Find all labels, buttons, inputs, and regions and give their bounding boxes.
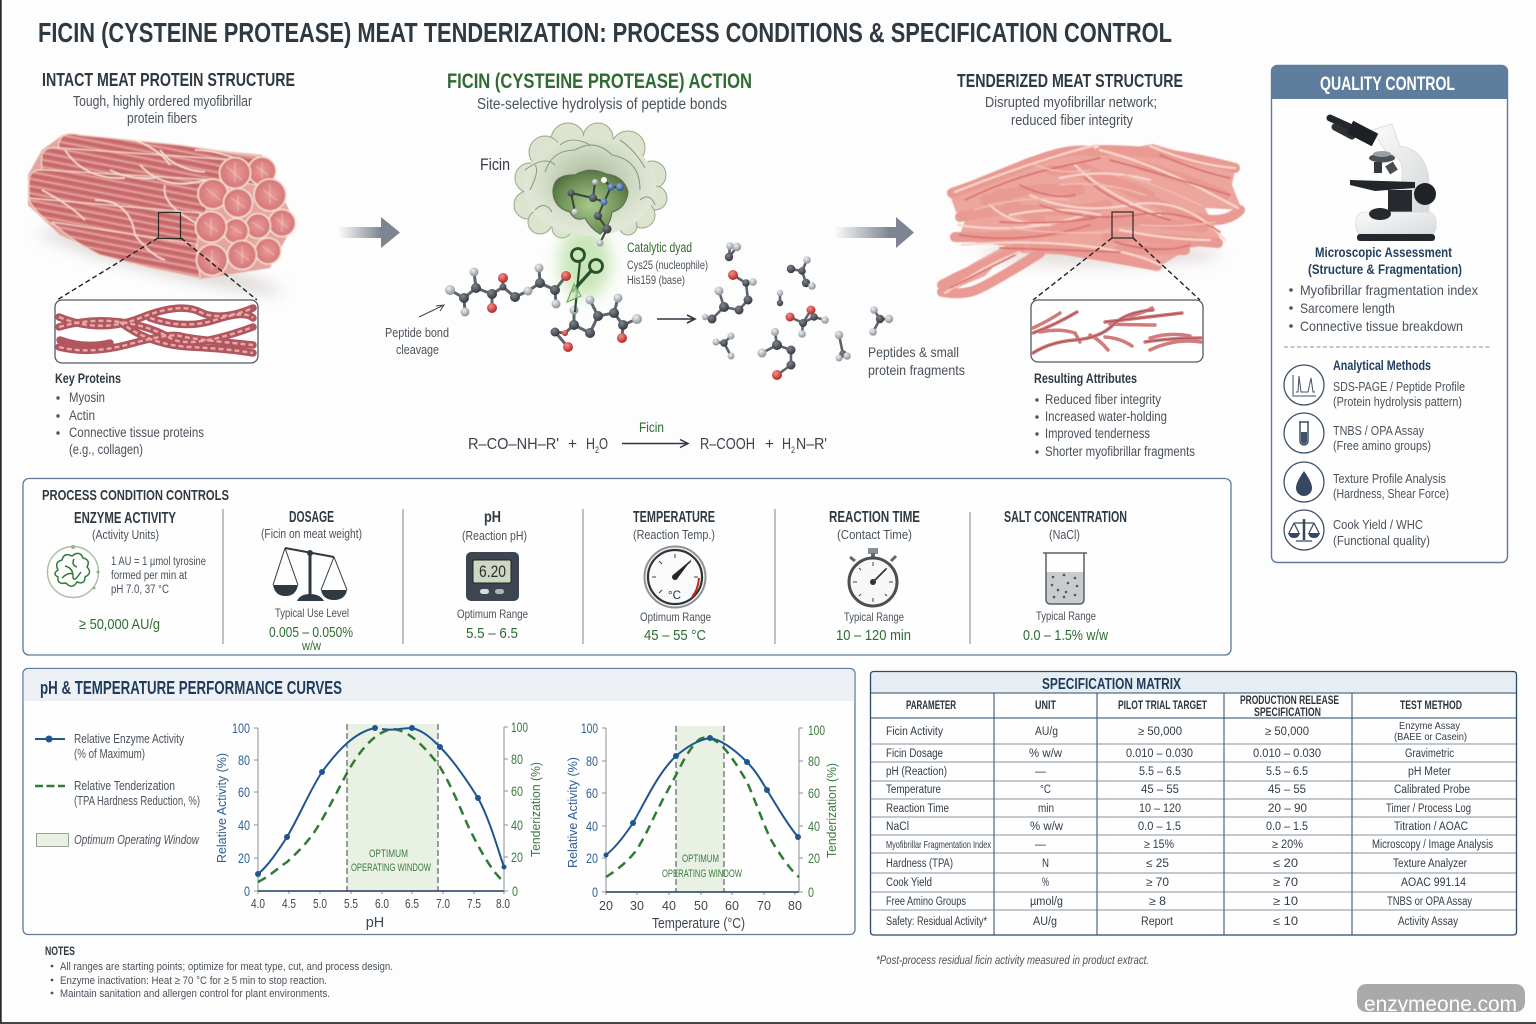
watermark xyxy=(1357,984,1525,1012)
subtitle: tenderized: reduced fiber integrity xyxy=(1011,112,1133,129)
legend: Relative Tenderization xyxy=(74,779,175,793)
equation: peptide hydrolysis: N–R' xyxy=(796,436,827,453)
column: salt concentration: SALT CONCENTRATION xyxy=(1004,509,1127,526)
chart: ph curves: 5.0 xyxy=(313,897,327,911)
panel: ficin action xyxy=(385,70,965,455)
equation: peptide hydrolysis: H xyxy=(782,436,791,453)
equation: peptide hydrolysis: 2 xyxy=(595,445,599,455)
column: salt concentration: (NaCl) xyxy=(1049,527,1080,542)
label: peptide bond cleavage: Peptide bond xyxy=(385,325,449,340)
chart: ph curves: 40 xyxy=(511,817,523,833)
chart: temperature curves: 80 xyxy=(808,753,820,769)
panel: process condition controls xyxy=(23,478,1231,655)
method: tnbs opa: (Free amino groups) xyxy=(1333,439,1431,453)
table rows: (BAEE or Casein) xyxy=(1394,731,1467,743)
column: ph: pH xyxy=(484,509,501,526)
method: tnbs opa xyxy=(1284,413,1431,453)
inset: fragmented fibers xyxy=(1031,300,1203,362)
arrow: intact to action xyxy=(338,217,400,248)
equation: peptide hydrolysis: + xyxy=(568,436,577,453)
heading: tenderized: TENDERIZED MEAT STRUCTURE xyxy=(957,71,1183,91)
chart: ph curves xyxy=(214,719,543,931)
table rows: AOAC 991.14 xyxy=(1401,877,1467,889)
chart: ph curves: pH xyxy=(366,915,384,931)
heading: specification matrix: SPECIFICATION MATRIX xyxy=(1042,676,1181,693)
subtitle: intact meat xyxy=(73,93,252,127)
chart: temperature curves: 70 xyxy=(757,899,771,913)
table rows: ≤ 25 xyxy=(1146,858,1169,870)
chart: ph curves: 80 xyxy=(238,752,250,768)
method: sds-page: SDS-PAGE / Peptide Profile xyxy=(1333,380,1465,394)
label: catalytic dyad: Catalytic dyad xyxy=(627,240,692,255)
chart: ph curves: 60 xyxy=(511,783,523,799)
table rows: Ficin Activity xyxy=(886,726,943,738)
chart: ph curves: 100 xyxy=(511,719,528,735)
list: key proteins: (e.g., collagen) xyxy=(69,442,143,457)
heading: process controls: PROCESS CONDITION CONTROLS xyxy=(42,487,229,504)
column: ph: (Reaction pH) xyxy=(462,528,527,543)
notes: All ranges are starting points; optimize for meat type, cut, and process design. xyxy=(60,961,393,973)
text: microscopic assessment: Microscopic Assessment xyxy=(1315,244,1452,260)
column: temperature: 45 – 55 °C xyxy=(644,627,706,644)
table rows: Texture Analyzer xyxy=(1393,858,1467,870)
table rows: Gravimetric xyxy=(1405,748,1454,760)
chart: ph curves: 20 xyxy=(511,849,523,865)
panel: performance curves xyxy=(23,668,855,934)
table rows: 20 – 90 xyxy=(1268,803,1307,815)
column: reaction time: 10 – 120 min xyxy=(836,627,911,644)
equation: peptide hydrolysis: O xyxy=(599,436,608,453)
column: enzyme activity: pH 7.0, 37 °C xyxy=(111,584,169,596)
chart: ph curves: 6.5 xyxy=(405,897,419,911)
table rows: Timer / Process Log xyxy=(1386,803,1471,815)
table rows: Hardness (TPA) xyxy=(886,858,953,870)
table rows xyxy=(886,720,1493,928)
label: peptide bond cleavage xyxy=(385,305,449,357)
table rows: N xyxy=(1042,858,1049,870)
chart: temperature curves: OPTIMUM xyxy=(682,853,719,865)
chart: temperature curves xyxy=(565,720,839,932)
list: key proteins: Key Proteins xyxy=(55,371,121,386)
table rows: 0.010 – 0.030 xyxy=(1253,748,1321,760)
legend xyxy=(35,732,200,847)
equation: peptide hydrolysis: H xyxy=(586,436,595,453)
equation: peptide hydrolysis: + xyxy=(765,436,774,453)
legend: Optimum Operating Window xyxy=(74,833,200,847)
method: tnbs opa: TNBS / OPA Assay xyxy=(1333,424,1425,438)
table rows: ≥ 50,000 xyxy=(1265,726,1309,738)
legend: Relative Enzyme Activity xyxy=(74,732,185,746)
chart: ph curves: 4.5 xyxy=(282,897,296,911)
panel: quality control xyxy=(1271,65,1508,562)
table rows: ≥ 70 xyxy=(1273,877,1298,889)
table rows: ≥ 15% xyxy=(1144,839,1174,851)
column: temperature: (Reaction Temp.) xyxy=(633,527,715,542)
label: peptides and fragments xyxy=(868,344,965,378)
chart: temperature curves: 100 xyxy=(581,720,598,736)
subtitle: intact meat: protein fibers xyxy=(127,110,197,127)
equation: peptide hydrolysis: Ficin xyxy=(639,419,664,435)
chart: temperature curves: 60 xyxy=(586,785,598,801)
heading: curves: pH & TEMPERATURE PERFORMANCE CURVES xyxy=(40,678,342,698)
table rows: Myofibrillar Fragmentation Index xyxy=(886,839,992,851)
table rows: 0.0 – 1.5 xyxy=(1266,821,1308,833)
text: microscopic assessment: (Structure & Fragmentation) xyxy=(1308,261,1462,277)
label: catalytic dyad xyxy=(627,240,708,287)
table rows: ≥ 20% xyxy=(1272,839,1303,851)
table rows: % w/w xyxy=(1029,748,1063,760)
heading: intact meat: INTACT MEAT PROTEIN STRUCTURE xyxy=(42,70,295,90)
column: enzyme activity: (Activity Units) xyxy=(92,527,159,542)
equation: peptide hydrolysis xyxy=(468,419,827,455)
table rows: — xyxy=(1035,766,1046,778)
chart: temperature curves: 80 xyxy=(586,753,598,769)
list: key proteins xyxy=(55,371,204,457)
column: ph: 5.5 – 6.5 xyxy=(466,625,518,642)
table header: PILOT TRIAL TARGET xyxy=(1118,700,1207,712)
molecules: peptide fragments xyxy=(702,242,893,380)
method: sds-page xyxy=(1284,365,1465,409)
inset: twisted protein filaments xyxy=(55,300,258,363)
chart: temperature curves: Relative Activity (%) xyxy=(565,757,580,868)
chart: temperature curves: 20 xyxy=(599,899,613,913)
illustration: ficin enzyme xyxy=(514,123,667,298)
method: cook yield: (Functional quality) xyxy=(1333,534,1430,548)
footnote: *Post-process residual ficin activity measured in product extract. xyxy=(876,955,1149,967)
column: enzyme activity xyxy=(48,510,206,633)
chart: ph curves: 20 xyxy=(238,850,250,866)
chart: ph curves: 4.0 xyxy=(251,897,265,911)
table rows: Cook Yield xyxy=(886,877,932,889)
chart: ph curves: 100 xyxy=(232,720,250,736)
notes: Enzyme inactivation: Heat ≥ 70 °C for ≥ 5 min to stop reaction. xyxy=(60,975,327,987)
legend: (% of Maximum) xyxy=(74,747,145,761)
subtitle: ficin action: Site-selective hydrolysis of peptide bonds xyxy=(477,96,727,113)
label: catalytic dyad: Cys25 (nucleophile) xyxy=(627,258,708,272)
notes xyxy=(45,946,393,1000)
table header: SPECIFICATION xyxy=(1254,707,1321,719)
panel: intact meat protein structure xyxy=(28,70,296,457)
list: resulting attributes: Reduced fiber integrity xyxy=(1045,392,1161,407)
column: reaction time: (Contact Time) xyxy=(837,527,912,542)
column: dosage: 0.005 – 0.050% xyxy=(269,625,353,641)
column: salt concentration: 0.0 – 1.5% w/w xyxy=(1023,627,1108,644)
column: ph xyxy=(457,509,528,642)
table rows: Report xyxy=(1141,916,1174,928)
chart: temperature curves: 100 xyxy=(808,722,825,738)
chart: temperature curves: Tenderization (%) xyxy=(824,763,839,858)
icon: stopwatch xyxy=(849,548,897,606)
label: peptides and fragments: Peptides & small xyxy=(868,344,959,360)
list: resulting attributes: Improved tenderness xyxy=(1045,426,1150,441)
table rows: Temperature xyxy=(886,784,941,796)
table rows: AU/g xyxy=(1033,916,1057,928)
chart: ph curves: 5.5 xyxy=(344,897,358,911)
column: reaction time: Typical Range xyxy=(844,610,904,624)
chart: ph curves: 7.0 xyxy=(436,897,450,911)
chart: temperature curves: 60 xyxy=(725,899,739,913)
chart: ph curves: Tenderization (%) xyxy=(528,762,543,857)
heading: analytical methods: Analytical Methods xyxy=(1333,357,1431,373)
molecule: peptide substrate xyxy=(445,264,642,352)
watermark: enzymeone.com xyxy=(1364,993,1517,1016)
method: texture profile xyxy=(1284,462,1449,502)
subtitle: tenderized: Disrupted myofibrillar network; xyxy=(985,94,1157,111)
icon: balance xyxy=(273,548,347,601)
table header: PRODUCTION RELEASE xyxy=(1240,695,1339,707)
table rows: ≥ 70 xyxy=(1146,877,1169,889)
chart: temperature curves: 0 xyxy=(592,884,598,900)
chart: ph curves: 7.5 xyxy=(467,897,481,911)
icon: enzyme xyxy=(48,545,100,598)
table rows: — xyxy=(1035,839,1046,851)
chart: ph curves: 60 xyxy=(238,784,250,800)
table: specification matrix xyxy=(870,671,1516,935)
text: microscopic assessment: Connective tissue breakdown xyxy=(1300,318,1463,334)
chart: temperature curves: OPERATING WINDOW xyxy=(662,868,742,880)
table rows: TNBS or OPA Assay xyxy=(1387,896,1472,908)
column: dosage: DOSAGE xyxy=(289,509,334,526)
icon: beaker xyxy=(1043,553,1087,604)
arrow: action to tenderized xyxy=(834,217,914,248)
column: dosage: (Ficin on meat weight) xyxy=(261,526,362,541)
column: enzyme activity: ≥ 50,000 AU/g xyxy=(79,616,160,633)
label: peptide bond cleavage: cleavage xyxy=(396,342,439,357)
heading: quality control: QUALITY CONTROL xyxy=(1320,74,1455,95)
table header xyxy=(906,695,1462,719)
table rows: pH (Reaction) xyxy=(886,766,947,778)
text: microscopic assessment xyxy=(1289,244,1478,334)
list: resulting attributes: Shorter myofibrillar fragments xyxy=(1045,444,1195,459)
arrow: reaction to fragments xyxy=(657,315,695,323)
notes: NOTES xyxy=(45,946,75,958)
table rows: 0.0 – 1.5 xyxy=(1138,821,1181,833)
notes: Maintain sanitation and allergen control for plant environments. xyxy=(60,988,330,1000)
table header: UNIT xyxy=(1035,700,1056,712)
table rows: 5.5 – 6.5 xyxy=(1139,766,1181,778)
column: ph: Optimum Range xyxy=(457,607,528,621)
table header: PARAMETER xyxy=(906,700,956,712)
table rows: 45 – 55 xyxy=(1268,784,1306,796)
list: resulting attributes xyxy=(1034,371,1195,459)
column: reaction time: REACTION TIME xyxy=(829,509,920,526)
chart: temperature curves: Temperature (°C) xyxy=(652,916,745,932)
illustration: intact muscle fiber bundle xyxy=(28,133,296,304)
table rows: ≤ 10 xyxy=(1273,916,1298,928)
icon: scissors xyxy=(567,248,602,312)
label: peptides and fragments: protein fragments xyxy=(868,362,965,378)
table rows: ≥ 50,000 xyxy=(1138,726,1182,738)
table rows: ≤ 20 xyxy=(1273,858,1298,870)
method: texture profile: (Hardness, Shear Force) xyxy=(1333,487,1449,501)
table rows: 45 – 55 xyxy=(1141,784,1179,796)
table rows: ≥ 8 xyxy=(1149,896,1166,908)
table rows: 0.010 – 0.030 xyxy=(1126,748,1193,760)
chart: ph curves: 0 xyxy=(244,883,250,899)
method: sds-page: (Protein hydrolysis pattern) xyxy=(1333,395,1462,409)
table rows: µmol/g xyxy=(1030,896,1063,908)
column: salt concentration: Typical Range xyxy=(1036,609,1096,623)
table rows: Free Amino Groups xyxy=(886,896,966,908)
table rows: % w/w xyxy=(1030,821,1064,833)
illustration: shredded meat fibers xyxy=(940,144,1242,300)
chart: ph curves: OPERATING WINDOW xyxy=(351,862,431,874)
list: resulting attributes: Increased water-holding xyxy=(1045,409,1167,424)
table rows: % xyxy=(1042,877,1049,889)
table rows: min xyxy=(1038,803,1054,815)
table rows: Titration / AOAC xyxy=(1394,821,1468,833)
table header: TEST METHOD xyxy=(1400,700,1462,712)
subtitle: intact meat: Tough, highly ordered myofibrillar xyxy=(73,93,252,110)
chart: ph curves: 40 xyxy=(238,817,250,833)
column: reaction time xyxy=(829,509,920,644)
list: key proteins: Myosin xyxy=(69,390,105,405)
icon: ph meter: 6.20 xyxy=(479,562,506,581)
heading: ficin action: FICIN (CYSTEINE PROTEASE) ACTION xyxy=(447,70,752,93)
panel: tenderized meat structure xyxy=(940,71,1242,459)
title: FICIN (CYSTEINE PROTEASE) MEAT TENDERIZATION: PROCESS CONDITIONS & SPECIFICATION CONTROL xyxy=(38,17,1172,48)
equation: peptide hydrolysis: R–CO–NH–R' xyxy=(468,436,559,453)
column: salt concentration xyxy=(1004,509,1127,644)
list: key proteins: Actin xyxy=(69,408,95,423)
table rows: °C xyxy=(1040,784,1051,796)
table rows: pH Meter xyxy=(1408,766,1451,778)
column: dosage: w/w xyxy=(301,639,322,653)
label: catalytic dyad: His159 (base) xyxy=(627,273,685,287)
table rows: AU/g xyxy=(1035,726,1058,738)
chart: ph curves: 8.0 xyxy=(496,897,510,911)
table rows: 5.5 – 6.5 xyxy=(1266,766,1308,778)
text: microscopic assessment: Sarcomere length xyxy=(1300,300,1395,316)
chart: temperature curves: 20 xyxy=(808,850,820,866)
column: temperature: TEMPERATURE xyxy=(633,509,715,526)
table rows: ≥ 10 xyxy=(1273,896,1298,908)
chart: temperature curves: 40 xyxy=(586,818,598,834)
equation: peptide hydrolysis: R–COOH xyxy=(700,436,755,453)
column: temperature xyxy=(633,509,715,644)
column: enzyme activity: ENZYME ACTIVITY xyxy=(74,510,176,527)
icon: thermometer dial: °C xyxy=(668,588,681,602)
list: key proteins: Connective tissue proteins xyxy=(69,425,204,440)
chart: temperature curves: 60 xyxy=(808,785,820,801)
list: resulting attributes: Resulting Attributes xyxy=(1034,371,1137,386)
table rows: Reaction Time xyxy=(886,803,949,815)
column: dosage xyxy=(261,509,362,653)
chart: temperature curves: 80 xyxy=(788,899,802,913)
table rows: Microscopy / Image Analysis xyxy=(1372,839,1493,851)
table rows: NaCl xyxy=(886,821,909,833)
table rows: 10 – 120 xyxy=(1139,803,1181,815)
column: temperature: Optimum Range xyxy=(640,610,711,624)
column: dosage: Typical Use Level xyxy=(275,606,349,620)
chart: temperature curves: 40 xyxy=(662,899,676,913)
chart: ph curves: 0 xyxy=(512,883,518,899)
chart: temperature curves: 30 xyxy=(630,899,644,913)
method: cook yield xyxy=(1284,510,1430,550)
table rows: Ficin Dosage xyxy=(886,748,943,760)
chart: ph curves: 80 xyxy=(511,751,523,767)
chart: ph curves: OPTIMUM xyxy=(369,848,408,860)
subtitle: tenderized xyxy=(985,94,1157,129)
chart: temperature curves: 20 xyxy=(586,850,598,866)
label: ficin: Ficin xyxy=(480,155,510,174)
table rows: Activity Assay xyxy=(1398,916,1458,928)
column: enzyme activity: 1 AU = 1 µmol tyrosine xyxy=(111,556,206,568)
legend: (TPA Hardness Reduction, %) xyxy=(74,794,200,808)
method: texture profile: Texture Profile Analysis xyxy=(1333,472,1446,486)
table rows: Safety: Residual Activity* xyxy=(886,916,987,928)
method: cook yield: Cook Yield / WHC xyxy=(1333,518,1423,532)
equation: peptide hydrolysis: 2 xyxy=(791,445,795,455)
table rows: Enzyme Assay xyxy=(1399,720,1461,732)
chart: temperature curves: 0 xyxy=(808,884,814,900)
chart: ph curves: 6.0 xyxy=(375,897,389,911)
chart: temperature curves: 40 xyxy=(808,818,820,834)
chart: ph curves: Relative Activity (%) xyxy=(214,753,229,863)
table rows: Calibrated Probe xyxy=(1394,784,1470,796)
icon: microscope xyxy=(1330,118,1436,241)
column: enzyme activity: formed per min at xyxy=(111,570,188,582)
chart: temperature curves: 50 xyxy=(694,899,708,913)
text: microscopic assessment: Myofibrillar fragmentation index xyxy=(1300,282,1478,298)
